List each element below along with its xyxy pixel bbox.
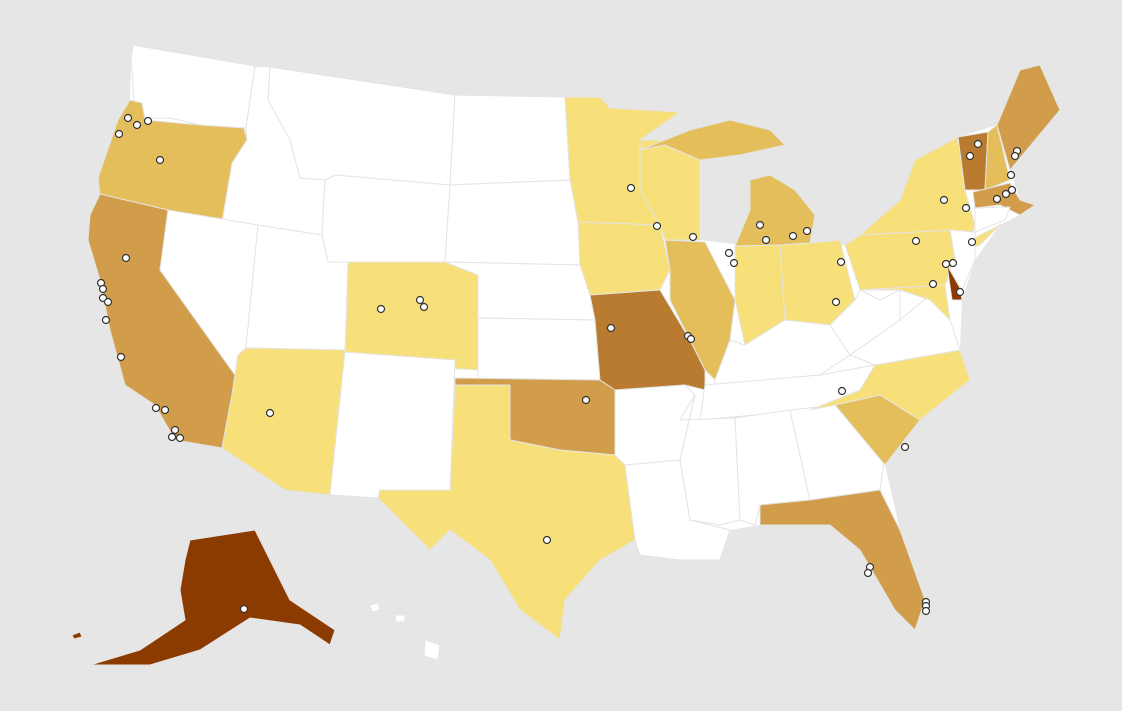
data points <box>98 114 1020 614</box>
land underlay <box>88 45 1060 640</box>
states <box>72 45 1060 665</box>
